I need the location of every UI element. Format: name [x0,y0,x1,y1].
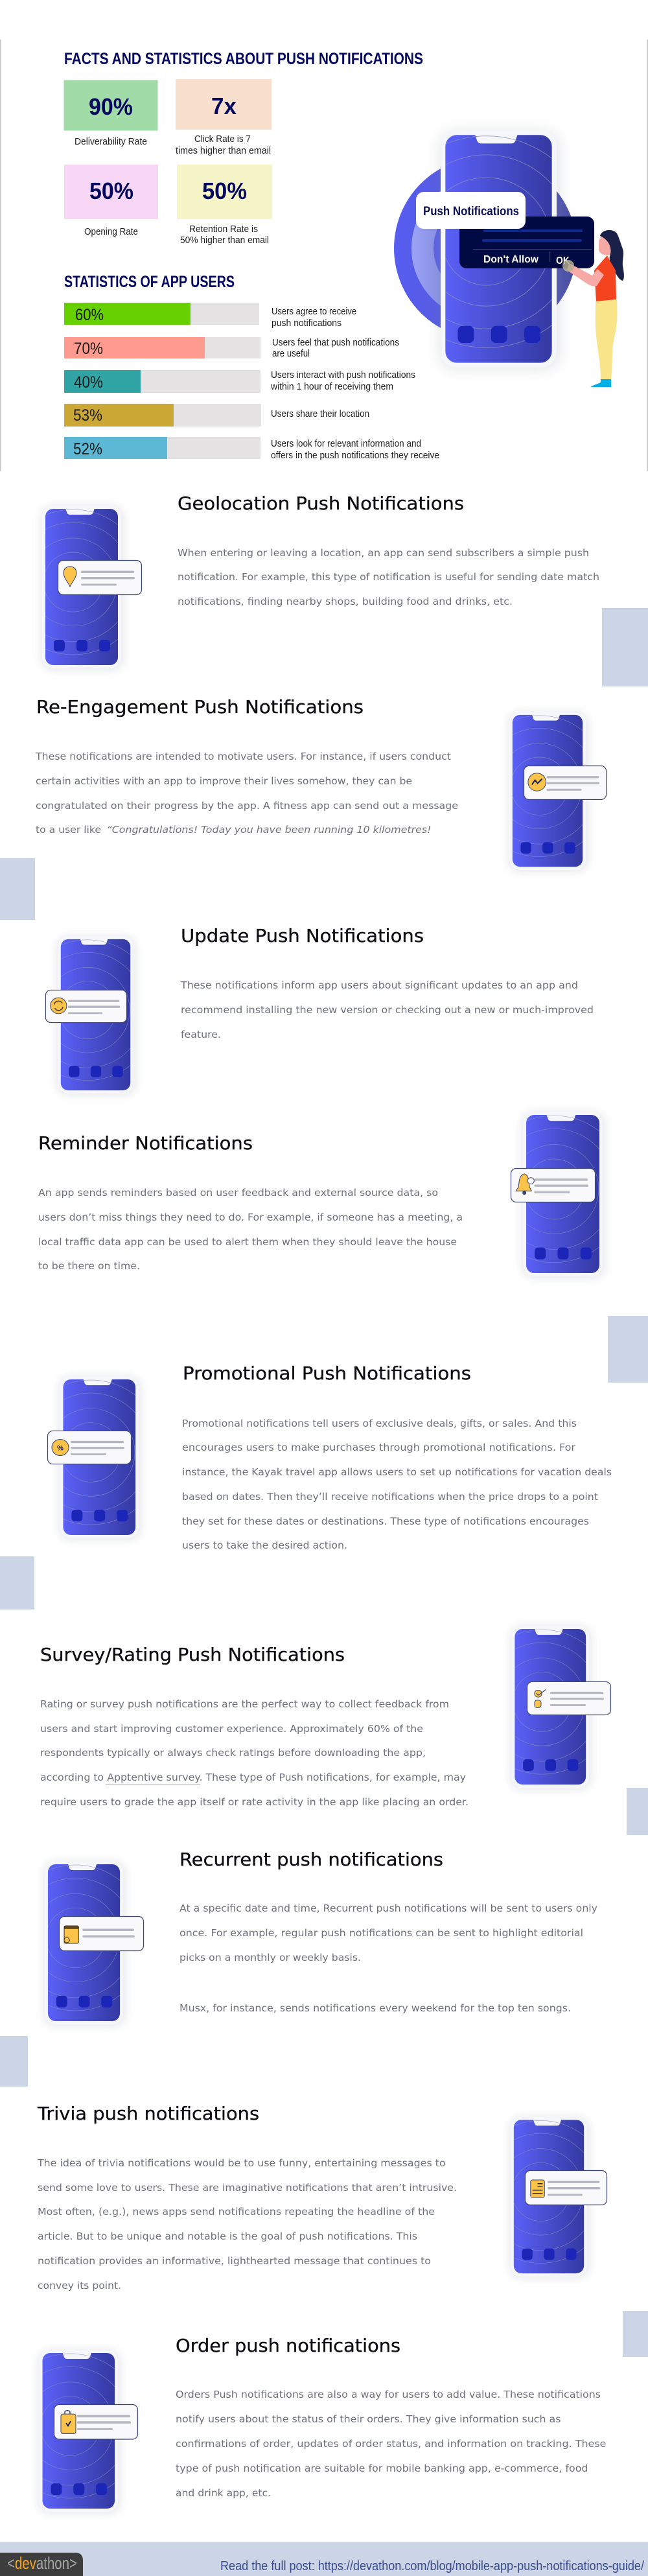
body text: users and start improving customer experience. Approximately 60% of the [40,1723,423,1735]
stat card: click rate: 7x [211,93,237,119]
decorative block [0,858,35,920]
heading: Recurrent push notifications [179,1849,443,1870]
hero illustration [380,130,624,387]
decorative block [602,608,648,686]
phone with discount notification [19,1376,163,1540]
bar: 70%: 70% [74,340,103,358]
bar: 70%: Users feel that push notifications [272,338,399,348]
body text: they set for these dates or destinations. These type of notifications encourages [182,1516,589,1527]
body text: and drink app, etc. [176,2487,271,2499]
body text [179,1903,597,2014]
heading: Re-Engagement Push Notifications [36,696,364,718]
section: order [0,2335,607,2514]
bar: 40%: within 1 hour of receiving them [270,382,393,392]
section: survey/rating [40,1626,613,1808]
body text: article. But to be unique and notable is the goal of push notifications. This [38,2231,417,2242]
phone with reminder notification [481,1112,627,1278]
icon: calendar [64,1926,78,1943]
section: recurrent [4,1849,597,2026]
push notification label [416,192,526,229]
icon: location pin [64,567,76,587]
body text: “Congratulations! Today you have been running 10 kilometres! [106,824,432,836]
body text: Promotional notifications tell users of exclusive deals, gifts, or sales. And this [182,1418,577,1429]
body text: encourages users to make purchases through promotional notifications. For [182,1442,576,1453]
body text [182,1418,612,1551]
stat card: deliverability: 90% [89,93,133,120]
body text: These notifications inform app users about significant updates to an app and [180,979,578,991]
body text [35,751,458,836]
body text [40,1698,469,1808]
section: re-engagement [35,696,610,872]
body text [178,547,599,607]
body text [176,2389,607,2499]
permission dialog: OK [556,255,570,266]
body text: once. For example, regular push notifications can be sent to highlight editorial [179,1927,583,1939]
section: promotional [19,1363,612,1551]
frame edge: right [647,40,648,471]
bar: 52%: Users look for relevant information and [271,439,421,449]
body text [37,2157,457,2291]
hero phone [380,130,593,370]
body text: picks on a monthly or weekly basis. [179,1952,361,1963]
icon: checklist [535,1690,546,1707]
hero backdrop circles [394,157,577,340]
stat card: opening rate [64,165,158,237]
bar: 60%: 60% [75,306,104,324]
body text [38,1187,463,1272]
body text: to a user like [36,824,101,836]
body text: to be there on time. [38,1260,140,1272]
body text: confirmations of order, updates of order status, and information on tracking. These [176,2438,607,2450]
icon: document [531,2180,544,2197]
devathon logo: <devathon> [7,2553,77,2573]
stat card: retention rate: 50% [202,178,247,204]
heading: statistics of app users: STATISTICS OF APP USERS [64,273,235,291]
body text: notifications, finding nearby shops, building food and drinks, etc. [178,596,513,607]
body text: The idea of trivia notifications would be to use funny, entertaining messages to [37,2157,446,2169]
bar: 40%: 40% [74,373,103,392]
phone with trivia notification [470,2117,611,2278]
phone with survey notification [471,1626,613,1790]
body text: notification. For example, this type of notification is useful for sending date match [178,571,599,583]
section: trivia [37,2103,611,2291]
body text: Rating or survey push notifications are the perfect way to collect feedback from [40,1698,449,1710]
body text: These notifications are intended to motivate users. For instance, if users conduct [35,751,451,762]
phone with update notification [18,936,157,1095]
icon: bell [516,1174,534,1195]
bar: 40% [64,370,415,393]
body text: notify users about the status of their orders. They give information such as [176,2413,561,2425]
section: reminder [38,1112,627,1278]
push notification label: Push Notifications [423,205,519,218]
stat card: retention rate: Retention Rate is [189,224,258,235]
stat card: deliverability [64,80,158,147]
body text: require users to grade the app itself or rate activity in the app like placing an order. [40,1796,469,1808]
phone with order notification [0,2350,143,2514]
bar: 52% [64,437,439,461]
body text: feature. [181,1029,221,1040]
bar: 70% [64,337,399,359]
footer [0,2542,648,2576]
woman figure [562,230,624,387]
stat card: click rate: times higher than email [176,146,271,156]
section: update [18,925,594,1095]
body text [180,979,594,1040]
frame edge: left [0,40,1,471]
section: geolocation [1,493,599,670]
body text: users don’t miss things they need to do. For example, if someone has a meeting, a [38,1212,463,1223]
body text: users to take the desired action. [182,1540,347,1551]
body text: congratulated on their progress by the app. A fitness app can send out a message [36,800,458,812]
body text: Musx, for instance, sends notifications every weekend for the top ten songs. [179,2002,571,2014]
heading: Trivia push notifications [37,2103,259,2124]
decorative block [0,1556,34,1610]
heading: Geolocation Push Notifications [178,493,464,514]
bar: 40%: Users interact with push notifications [271,370,415,381]
phone with progress notification [469,712,610,872]
bar: 52%: offers in the push notifications they receive [271,451,439,461]
phone with location notification [1,506,146,670]
heading: Order push notifications [176,2335,400,2356]
body text: convey its point. [38,2280,121,2291]
bar: 60%: Users agree to receive [272,307,356,317]
stat card: retention rate: 50% higher than email [180,235,269,246]
body text: recommend installing the new version or checking out a new or much-improved [181,1004,594,1016]
stat card: click rate [176,79,272,156]
bar: 60% [64,303,356,329]
icon: shopping bag [61,2411,76,2433]
bar: 53%: 53% [73,406,102,425]
body text: notification provides an informative, lighthearted message that continues to [38,2255,431,2267]
decorative block [627,1788,648,1835]
bar: 53%: Users share their location [271,409,369,419]
body text: At a specific date and time, Recurrent push notifications will be sent to users only [179,1903,597,1914]
body text: Orders Push notifications are also a way for users to add value. These notifications [176,2389,601,2400]
icon: refresh [51,998,67,1014]
heading: Promotional Push Notifications [183,1363,471,1384]
stat card: click rate: Click Rate is 7 [194,134,251,145]
icon: progress chart [528,773,546,791]
body text: based on dates. Then they’ll receive notifications when the price drops to a point [182,1491,598,1503]
title: facts and statistics: FACTS AND STATISTICS ABOUT PUSH NOTIFICATIONS [64,50,423,68]
permission dialog [459,217,594,268]
body text: instance, the Kayak travel app allows users to set up notifications for vacation deals [182,1466,612,1478]
bar: 52%: 52% [73,440,102,458]
stat card: opening rate: Opening Rate [84,227,138,237]
bar: 70%: are useful [272,349,310,359]
heading: Reminder Notifications [38,1132,253,1154]
icon: percent: % [57,1445,64,1452]
phone with calendar notification [4,1861,148,2026]
stat card: retention rate [177,165,272,246]
body text: type of push notification are suitable for mobile banking app, e-commerce, food [176,2463,588,2474]
stat card: opening rate: 50% [89,178,133,204]
permission dialog: Don't Allow [483,254,539,265]
body text: respondents typically or always check ratings before downloading the app, [40,1747,426,1759]
bar: 60%: push notifications [272,318,341,329]
heading: Survey/Rating Push Notifications [40,1644,345,1665]
body text: certain activities with an app to improve their lives somehow, they can be [36,775,412,787]
heading: Update Push Notifications [181,925,424,946]
decorative block [623,2311,648,2357]
bar: 53% [64,404,369,427]
body text: Most often, (e.g.), news apps send notifications repeating the headline of the [38,2206,435,2218]
body text: send some love to users. These are imaginative notifications that aren’t intrusive. [38,2182,457,2194]
decorative block [0,2036,28,2087]
decorative block [608,1316,648,1383]
body text: local traffic data app can be used to alert them when they should leave the house [38,1236,457,1248]
stat card: deliverability: Deliverability Rate [75,137,147,147]
body text: When entering or leaving a location, an app can send subscribers a simple push [178,547,589,559]
body text: according to Apptentive survey. These type of Push notifications, for example, may [40,1772,466,1783]
body text: An app sends reminders based on user feedback and external source data, so [38,1187,438,1199]
